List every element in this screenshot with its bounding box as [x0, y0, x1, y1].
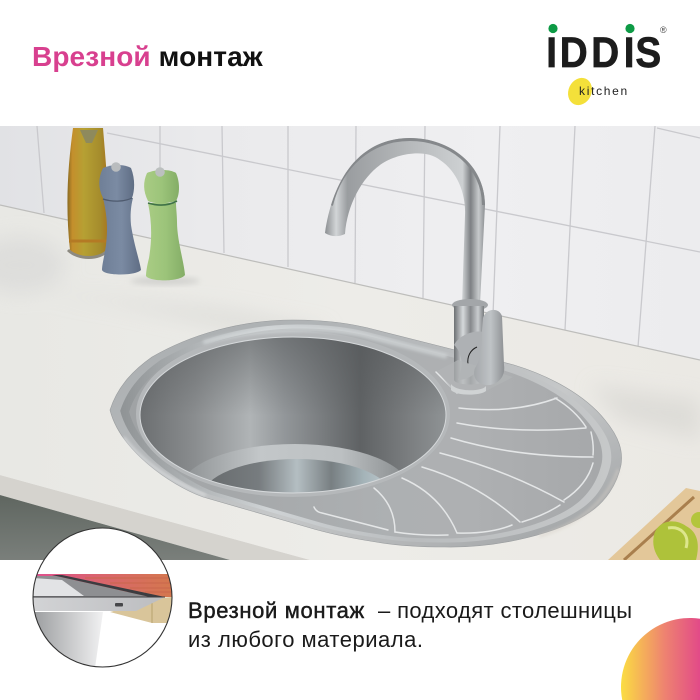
counter front edge: [0, 475, 310, 560]
logo green dot right: [625, 24, 635, 33]
kitchen sink photo scene: [0, 126, 700, 560]
bowl edge highlight: [140, 337, 446, 493]
logo: IDDIS kitchen: [546, 24, 667, 109]
inset metal reflection: [33, 576, 150, 597]
sink outer rim: [110, 320, 622, 547]
bowl floor lip: [190, 444, 399, 480]
description text: [188, 598, 632, 652]
olive oil bottle: [67, 128, 109, 258]
under-counter dark area: [0, 495, 230, 560]
rim highlights: [124, 330, 618, 536]
description line 2: из любого материала.: [188, 627, 423, 652]
faucet elbow: [454, 332, 484, 380]
inset circle outline: [33, 528, 172, 667]
faucet spout: [325, 138, 485, 304]
inset rim slot: [115, 603, 123, 606]
cutting board: [608, 488, 700, 560]
faucet lever handle: [474, 310, 504, 385]
inset circle: undermount detail: [33, 528, 172, 668]
inset white disc: [33, 528, 172, 667]
bowl ring: [136, 332, 388, 497]
sink drainer deck: [129, 328, 602, 538]
logo kitchen word: kitchen: [579, 84, 629, 98]
title: Врезной монтаж: [32, 41, 264, 72]
inset worktop wood layer: [33, 574, 172, 597]
faucet foot plate: [441, 360, 479, 388]
inset sink rim: [33, 597, 165, 611]
blue pepper mill: [99, 162, 141, 274]
faucet: [325, 138, 513, 395]
green pepper: [653, 512, 700, 560]
logo yellow blob: [564, 74, 596, 109]
description line 1: Врезной монтаж: [188, 598, 365, 623]
description line 1: – подходят столешницы: [378, 598, 632, 623]
drainer grooves: [314, 372, 593, 535]
green pepper mill: [144, 167, 185, 280]
logo green dot left: [548, 24, 558, 33]
faucet body: [454, 306, 484, 384]
countertop: [0, 205, 700, 560]
logo wordmark: IDDIS: [546, 28, 661, 76]
wall junction line: [0, 205, 700, 360]
tiled wall: [0, 126, 700, 360]
gradient corner circle: [621, 618, 700, 700]
faucet base collar: [452, 299, 488, 309]
bowl floor: [212, 459, 380, 492]
sink: [110, 320, 622, 547]
sink bowl: [140, 338, 446, 492]
inset bowl wall: [33, 612, 103, 668]
pepper mill shadows: [130, 277, 200, 285]
sink inner rim band: [120, 325, 611, 542]
counter soft shadows: [0, 237, 700, 440]
logo registered mark: ®: [660, 25, 667, 35]
inset chipboard edge: [110, 597, 172, 623]
